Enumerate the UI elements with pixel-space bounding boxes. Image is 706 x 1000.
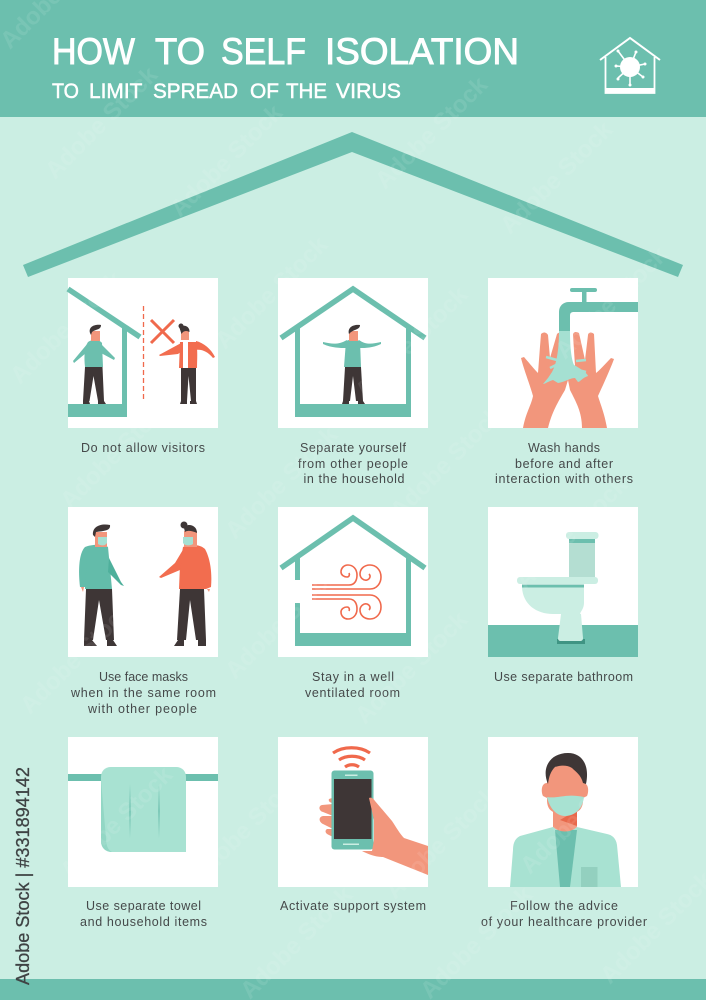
right hand	[568, 332, 614, 428]
caption: healthcare: Follow the advice	[510, 899, 618, 913]
caption: separate yourself: from other people	[298, 457, 408, 471]
header band	[0, 0, 706, 117]
person with arms out	[323, 325, 381, 404]
watermark: repeated: Adobe Stock	[515, 756, 638, 879]
caption: wash hands: interaction with others	[495, 472, 633, 486]
panel: face masks	[68, 507, 218, 657]
neck	[553, 808, 577, 832]
caption: ventilated room: Stay in a well	[312, 670, 394, 684]
watermark: repeated: Adobe Stock	[15, 596, 138, 719]
caption: separate yourself: Separate yourself	[300, 441, 407, 455]
hair	[546, 753, 587, 784]
watermark: repeated: Adobe Stock	[165, 99, 288, 222]
surgical mask	[547, 796, 584, 816]
water droplets	[546, 357, 586, 372]
watermark: repeated: Adobe Stock	[55, 391, 178, 514]
watermark: repeated: Adobe Stock	[220, 561, 343, 684]
caption: towel: Use separate towel	[86, 899, 201, 913]
icon: wind	[312, 565, 381, 619]
visitor	[159, 324, 215, 404]
watermark: repeated: Adobe Stock	[350, 281, 473, 404]
large roof	[23, 132, 683, 277]
caption: face masks: when in the same room	[70, 686, 216, 700]
subtitle: SPREAD	[153, 79, 238, 103]
caption: towel	[80, 899, 207, 929]
footer band	[0, 979, 706, 1000]
panel: healthcare provider	[488, 737, 638, 887]
caption: face masks: Use face masks	[99, 670, 188, 684]
panel: separate bathroom	[488, 507, 638, 657]
faucet	[559, 288, 638, 332]
house	[281, 289, 425, 417]
watermark: repeated: Adobe Stock	[5, 266, 128, 389]
house with gap	[281, 518, 425, 646]
water	[543, 331, 588, 384]
icon: red cross	[151, 320, 174, 343]
panel: separate towel	[68, 737, 218, 887]
panel: ventilated room	[278, 507, 428, 657]
back fingers	[319, 798, 333, 837]
icon: house with virus	[600, 38, 660, 93]
watermark: repeated: Adobe Stock	[495, 116, 618, 239]
watermark: repeated: Adobe Stock	[510, 471, 633, 594]
caption: face masks: with other people	[87, 702, 197, 716]
watermark: repeated: Adobe Stock	[385, 401, 508, 524]
subtitle: OF	[250, 79, 279, 103]
shirt	[555, 830, 577, 887]
title: SELF	[221, 31, 306, 72]
dashed divider	[142, 306, 144, 402]
caption: wash hands: Wash hands	[528, 441, 600, 455]
panel: support system	[278, 737, 428, 887]
watermark: repeated: Adobe Stock	[220, 421, 343, 544]
left hand	[521, 332, 568, 428]
panel: do not allow visitors	[68, 278, 218, 428]
coat	[510, 827, 621, 887]
watermark: repeated: Adobe Stock	[185, 766, 308, 889]
caption: wash hands: before and after	[515, 457, 613, 471]
house cutaway	[68, 289, 140, 417]
caption: wash hands	[495, 441, 633, 486]
person inside	[73, 325, 115, 404]
panel: separate yourself	[278, 278, 428, 428]
title: ISOLATION	[325, 31, 519, 72]
subtitle: VIRUS	[336, 79, 401, 103]
towel	[101, 767, 186, 852]
watermark: repeated: Adobe Stock	[380, 781, 503, 904]
caption: separate yourself: in the household	[304, 472, 405, 486]
rail	[68, 774, 218, 781]
watermark: repeated: Adobe Stock	[55, 761, 178, 884]
caption: towel: and household items	[80, 915, 207, 929]
title: TO	[155, 31, 205, 72]
watermark: stock id: Adobe Stock | #331894142	[12, 767, 33, 985]
caption: face masks	[70, 670, 216, 716]
right person masked	[159, 522, 211, 646]
title: HOW	[52, 31, 135, 72]
caption: visitors: Do not allow visitors	[81, 441, 205, 455]
text block: captions	[70, 441, 647, 929]
pocket	[581, 867, 598, 887]
caption: healthcare: of your healthcare provider	[481, 915, 647, 929]
watermark: repeated: Adobe Stock	[350, 606, 473, 729]
hand	[362, 798, 428, 875]
subtitle: LIMIT	[89, 79, 142, 103]
subtitle: THE	[286, 79, 327, 103]
icon: wifi signal	[333, 748, 370, 767]
caption: ventilated room: ventilated room	[305, 686, 400, 700]
watermark: repeated: Adobe Stock	[210, 231, 333, 354]
caption: ventilated room	[305, 670, 400, 700]
caption: bathroom: Use separate bathroom	[494, 670, 633, 684]
floor	[488, 625, 638, 657]
caption: healthcare	[481, 899, 647, 929]
caption: separate yourself	[298, 441, 408, 486]
toilet	[517, 532, 598, 644]
panel: wash hands	[488, 278, 638, 428]
face	[547, 765, 583, 814]
watermark: repeated: Adobe Stock	[40, 61, 163, 184]
subtitle: TO	[52, 79, 79, 103]
watermark: repeated: Adobe Stock	[550, 241, 673, 364]
phone	[332, 770, 374, 850]
left person masked	[79, 524, 124, 646]
watermark: repeated: Adobe Stock	[370, 71, 493, 194]
caption: support system: Activate support system	[280, 899, 426, 913]
ears	[542, 783, 588, 798]
